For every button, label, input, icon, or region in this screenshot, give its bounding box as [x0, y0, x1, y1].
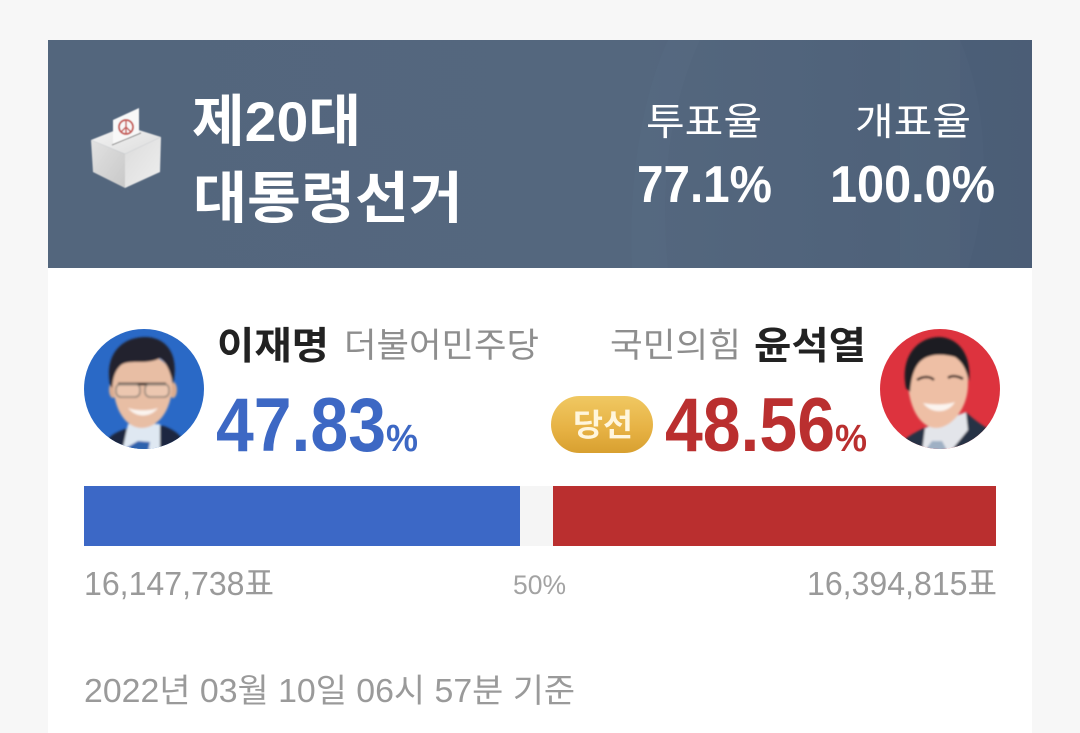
bar: Lee Jae-myung	[84, 486, 520, 546]
turnout stat: 투표율	[646, 102, 762, 144]
candidate name and party: Yoon Suk-yeol	[610, 326, 866, 368]
timestamp: 2022년 03월 10일 06시 57분 기준	[84, 672, 575, 709]
icon: ballot box	[91, 108, 161, 188]
vote count: Yoon Suk-yeol: 16,394,815표	[807, 565, 997, 602]
candidate name and party: Yoon Suk-yeol: 국민의힘	[610, 327, 741, 365]
candidate photo: Yoon Suk-yeol	[880, 329, 1000, 452]
candidate name and party: Yoon Suk-yeol: 윤석열	[754, 326, 866, 368]
counting rate stat: 100.0%	[830, 156, 995, 214]
winner badge	[551, 396, 653, 453]
vote share: Lee Jae-myung: %	[386, 418, 418, 460]
candidate name and party: Lee Jae-myung: 이재명	[217, 326, 329, 368]
bar: Yoon Suk-yeol	[553, 486, 996, 546]
turnout stat: 77.1%	[637, 156, 772, 214]
vote count: Lee Jae-myung: 16,147,738표	[84, 565, 274, 602]
candidate photo: Lee Jae-myung	[84, 329, 204, 452]
vote share: Lee Jae-myung: 47.83	[216, 383, 386, 468]
winner badge: 당선	[573, 408, 633, 443]
vote share: Yoon Suk-yeol: %	[835, 418, 867, 460]
midpoint label: 50%	[513, 570, 566, 600]
panel: white card body	[48, 268, 1032, 733]
vote share: Yoon Suk-yeol: 48.56	[665, 383, 835, 468]
candidate name and party: Lee Jae-myung: 더불어민주당	[344, 327, 539, 365]
title	[192, 90, 463, 230]
bar chart: vote share comparison	[84, 486, 996, 546]
candidate name and party: Lee Jae-myung	[217, 326, 539, 368]
counting rate stat: 개표율	[855, 102, 971, 144]
counting rate stat	[830, 102, 995, 214]
panel: header banner	[48, 40, 1032, 268]
title: 대통령선거	[193, 167, 463, 230]
title: 제20대	[192, 90, 361, 153]
turnout stat	[637, 102, 772, 214]
